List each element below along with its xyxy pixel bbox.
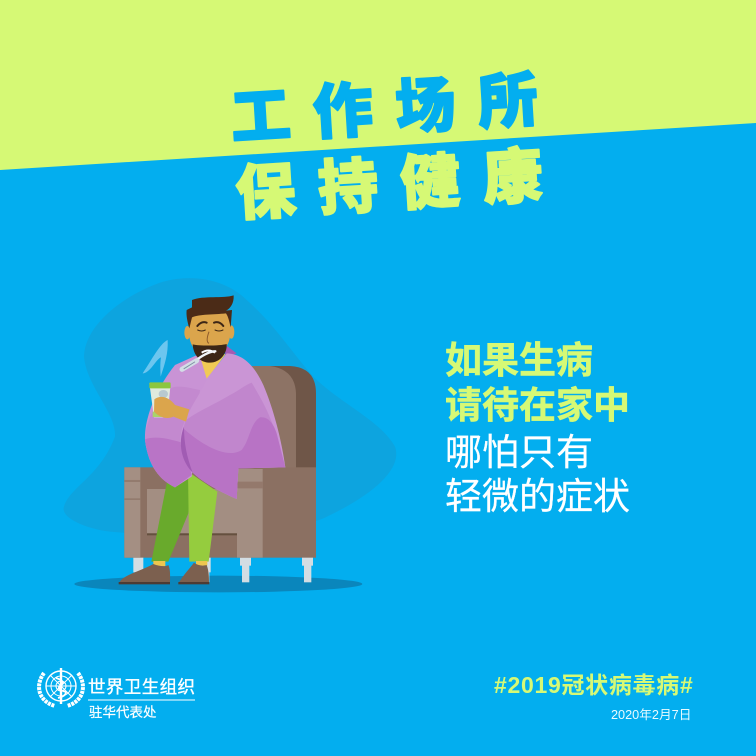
- cup: [149, 382, 171, 417]
- highlighted message: [445, 340, 630, 426]
- beard: [193, 344, 227, 363]
- date: 2020年2月7日: [611, 708, 691, 722]
- background blob: [64, 278, 396, 536]
- blanket back collar: [225, 345, 237, 357]
- highlighted message: 如果生病: [445, 340, 593, 381]
- side message: [445, 340, 630, 517]
- hashtag: #2019冠状病毒病#: [494, 672, 693, 698]
- top yellow-green banner: [0, 0, 756, 170]
- ears: [184, 326, 190, 339]
- floor shadow: [74, 576, 362, 592]
- office name: 驻华代表处: [89, 705, 157, 720]
- chair base: [124, 467, 316, 558]
- chair back: [267, 366, 316, 470]
- seat cushion: [147, 489, 237, 533]
- WHO logo: [39, 668, 195, 720]
- mouth: [202, 350, 215, 353]
- title line 2: 保持健康: [234, 141, 567, 228]
- icon: WHO emblem: [39, 668, 83, 706]
- organisation name: 世界卫生组织: [88, 677, 195, 697]
- armchair: [124, 366, 316, 583]
- hand and forearm: [154, 397, 189, 422]
- blanket right side: [181, 353, 285, 499]
- message continuation: 哪怕只有: [445, 432, 593, 473]
- chair legs: [133, 557, 313, 583]
- title: [229, 65, 567, 228]
- neck and shirt: [198, 354, 226, 379]
- message continuation: 轻微的症状: [445, 476, 630, 517]
- steam: [143, 340, 168, 377]
- nose: [207, 332, 209, 343]
- head: [184, 295, 234, 363]
- message continuation: [445, 432, 630, 517]
- title line 1: 工作场所: [229, 65, 562, 152]
- blanket left side: [145, 354, 207, 487]
- socks: [153, 561, 165, 566]
- left arm: [124, 467, 140, 558]
- illustration: sick man on armchair: [64, 278, 396, 592]
- face: [189, 311, 230, 355]
- thermometer: [182, 351, 215, 369]
- hair: [186, 295, 234, 328]
- eyebrows and eyes: [197, 322, 223, 331]
- shoes: [119, 563, 209, 584]
- right arm: [237, 469, 263, 558]
- legs: [151, 472, 217, 566]
- highlighted message: 请待在家中: [445, 385, 630, 426]
